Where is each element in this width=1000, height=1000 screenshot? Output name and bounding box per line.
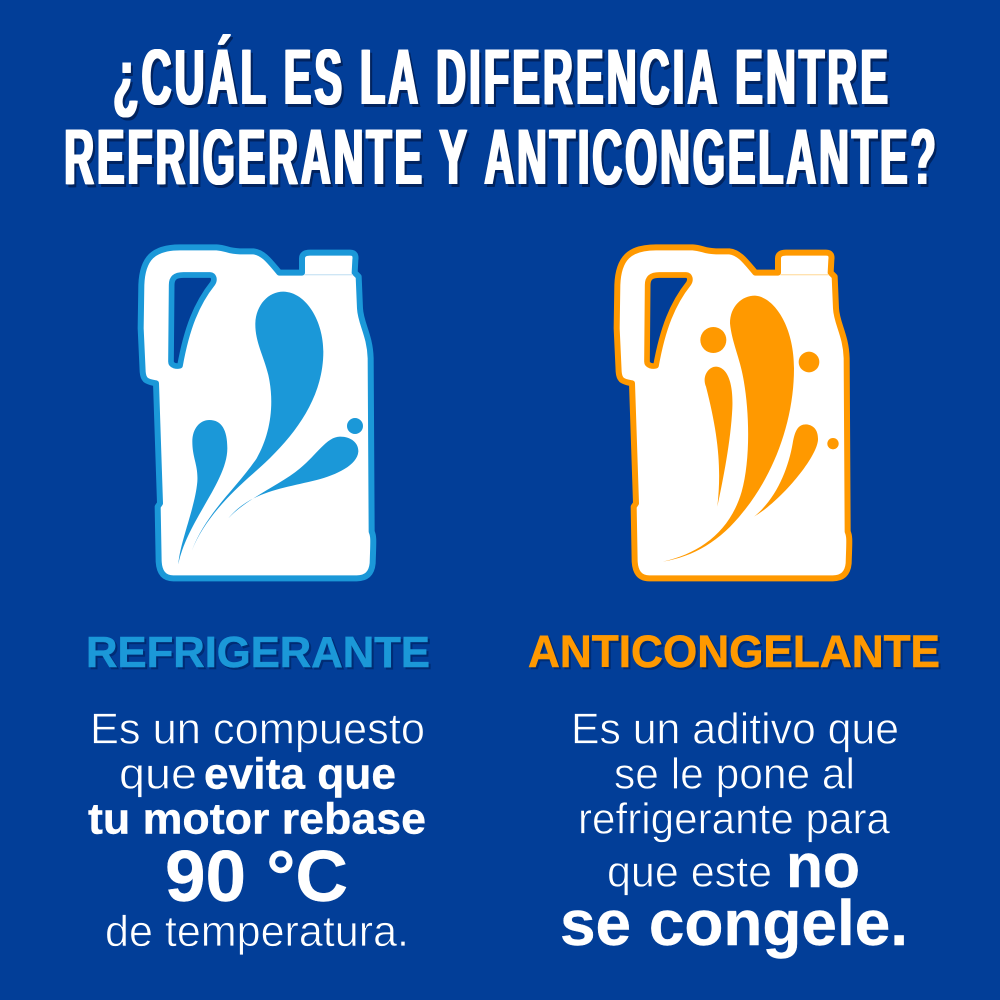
text block: refrigerante description: de temperatura. bbox=[105, 907, 409, 956]
title: ¿CUÁL ES LA DIFERENCIA ENTRE bbox=[112, 32, 890, 121]
text block: anticongelante description bbox=[560, 704, 908, 959]
text block: anticongelante description: no bbox=[786, 832, 860, 901]
text block: refrigerante description: tu motor rebase bbox=[88, 794, 426, 844]
text block: anticongelante description: que este bbox=[607, 848, 772, 896]
heading: anticongelante: ANTICONGELANTE bbox=[530, 628, 942, 679]
heading: anticongelante: ANTICONGELANTE bbox=[528, 626, 940, 677]
text block: anticongelante description: se le pone al bbox=[614, 750, 855, 798]
heading: refrigerante: REFRIGERANTE bbox=[88, 630, 432, 679]
text block: refrigerante description: evita que bbox=[204, 750, 396, 798]
icon: orange antifreeze jug bbox=[617, 247, 849, 578]
text block: refrigerante description: Es un compuesto bbox=[90, 704, 425, 754]
text block: anticongelante description: refrigerante para bbox=[578, 794, 891, 844]
text block: refrigerante description: 90 °C bbox=[165, 837, 348, 917]
title bbox=[63, 32, 937, 201]
text block: refrigerante description: que bbox=[119, 750, 197, 798]
heading: refrigerante: REFRIGERANTE bbox=[86, 628, 430, 677]
icon: blue coolant jug bbox=[141, 247, 373, 578]
title: REFRIGERANTE Y ANTICONGELANTE? bbox=[63, 112, 937, 201]
text block: anticongelante description: se congele. bbox=[560, 887, 908, 959]
text block: anticongelante description: Es un aditivo que bbox=[571, 704, 899, 754]
text block: refrigerante description bbox=[88, 704, 426, 956]
